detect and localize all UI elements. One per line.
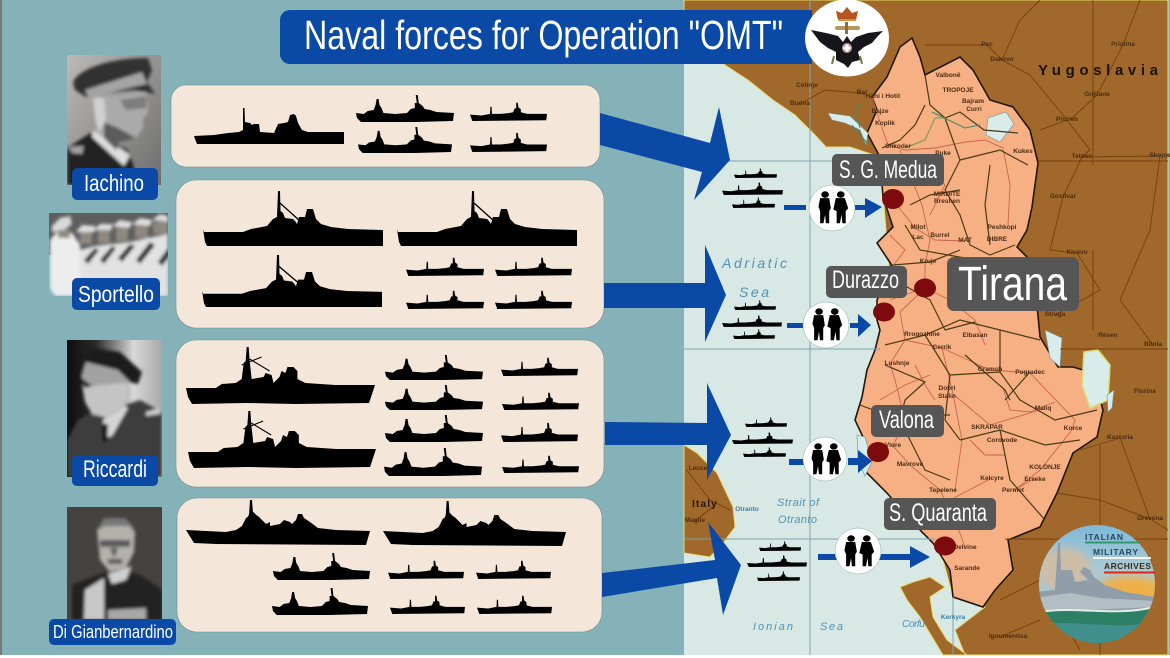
place names: Koplik [875,120,895,127]
name label [72,455,158,486]
place names: Kicevo [1066,249,1088,256]
logo: Italian Military Archives [1039,525,1155,643]
place names: Otranto [735,506,759,513]
place names: Budva [790,100,810,107]
label: Yugoslavia: Yugoslavia [1038,62,1159,79]
place names: Kruje [920,258,937,265]
marker: Valona [867,442,889,462]
place names: Dakovo [990,56,1014,63]
label: Tirana: Tirana [958,258,1067,311]
logo text: ARCHIVES [1104,561,1151,571]
logo text: MILITARY [1093,547,1138,557]
place names: Kerkyra [941,614,965,621]
place names: Tepelene [929,487,957,494]
place names: Lushnje [885,360,910,367]
place names: Sarande [954,565,980,572]
ships: cruisers [384,355,483,476]
place names: Kelcyre [980,475,1004,482]
logo text [1085,532,1151,571]
place names: Gnjilane [1084,91,1110,98]
ships: cruisers [356,95,454,153]
place names: Kastoria [1107,434,1133,441]
logo text: ITALIAN [1085,532,1123,542]
place names: Pristina [1111,41,1135,48]
landing arrow: Valona [789,450,872,473]
place names: Cerrik [933,344,952,351]
land: Albania [855,38,1103,607]
place names: Gostivar [1050,193,1077,200]
panel: Sportello force [176,180,604,328]
place names: Valbonë [936,72,961,79]
label: S. G. Medua [832,154,944,186]
label: S. Quaranta [884,498,996,530]
ships: battleships [186,500,566,546]
place names: Dobri [939,385,956,392]
marker: Tirana [914,278,936,298]
landing arrow: S. Quaranta [818,546,930,568]
arrow: Sportello to Durazzo [604,245,726,342]
label: Durazzo: Durazzo [832,266,899,294]
troops circle: Valona [803,437,847,481]
place names: Prizren [1056,116,1078,123]
ships: cruisers [272,553,370,615]
arrow: Riccardi to Valona [605,383,731,480]
place names: Grevena [1137,515,1163,522]
arrow: Di Gianbernardino to S. Quaranta [602,522,741,615]
place names: Lac [912,234,924,241]
label: Ionian Sea: Sea [820,621,843,633]
convoy: Valona [732,417,793,457]
place names: Struga [1045,311,1066,318]
label: Strait of Otranto: Otranto [778,514,817,526]
place names: MAT [958,237,972,244]
place names: Bitola [1144,341,1162,348]
place names: Stalin [938,393,956,400]
place names: Delvine [953,544,977,551]
place names: Puke [935,150,951,157]
place names: Tetovo [1072,153,1092,160]
ships: battleships [186,347,376,468]
label: S. G. Medua: S. G. Medua [839,156,937,184]
name label: Riccardi [83,456,147,483]
place names: Bajram [962,98,984,105]
icon: Savoy eagle emblem [805,0,889,76]
label: Italy: Italy [692,498,717,510]
grid lines [684,0,953,655]
place names: Bajze [872,108,889,115]
place names: Shkoder [885,143,911,150]
label: Valona: Valona [879,406,934,434]
place names: Mavrove [897,461,924,468]
portrait: Sportello [49,213,168,310]
place names: DIBRE [987,236,1008,243]
label: Adriatic Sea: Sea [739,284,769,300]
portrait: Di Gianbernardino [49,507,176,645]
land: Corfu [900,577,967,655]
place names: Burrel [930,232,950,239]
name label: Di Gianbernardino [53,622,173,642]
place names: Gramsh [978,366,1002,373]
place names: Elbasan [963,332,987,339]
label: Adriatic Sea: Adriatic [721,255,787,271]
name label: Sportello [78,281,154,307]
troops circle: S. G. Medua [809,185,855,231]
ships: destroyers [406,258,572,309]
panel: Di Gianbernardino force [177,498,602,632]
label: Valona [871,405,944,437]
place names: Vlore [885,442,902,449]
place names: Lecce [689,465,708,472]
convoy: Durazzo [722,300,782,339]
troops circle: Durazzo [803,302,849,348]
panel: Iachino force [171,85,600,167]
place names: Pogradec [1015,369,1045,376]
place names: Permet [1002,487,1025,494]
place names: Rreshen [934,198,960,205]
portrait: Iachino [67,55,161,200]
place names: TROPOJE [942,87,974,94]
land: Italy [684,445,735,557]
place names: Curri [966,106,982,113]
label: S. Quaranta: S. Quaranta [889,499,987,527]
place names: Igoumenitsa [989,633,1028,640]
label: Strait of Otranto: Strait of [777,497,820,509]
place names: Peshkopi [988,224,1017,231]
title banner [280,10,812,64]
ship: battleship [194,108,344,144]
label: Ionian Sea: Ionian [753,621,793,633]
marker: Durazzo [873,302,895,322]
place names: Florina [1134,388,1156,395]
convoy: S. Quaranta [747,541,807,581]
place names: Corovode [987,437,1018,444]
label: Durazzo [826,266,907,298]
ships: destroyers [388,561,552,614]
place names: Bar [857,89,868,96]
place names: Cetinje [796,82,818,89]
ships: destroyers [470,103,547,152]
label: Strait of Otranto [777,497,820,526]
arrow: Iachino to northern landing [600,107,730,200]
place names: Rrogozhine [904,331,940,338]
place names: Milot [910,224,926,231]
panel: Riccardi force [176,340,604,487]
place names: SKRAPAR [971,424,1003,431]
place names: KOLONJE [1029,464,1061,471]
ships: destroyers [501,358,579,473]
portrait: Riccardi [67,340,162,486]
troops circle: S. Quaranta [835,528,881,574]
landing arrow: S. G. Medua [784,198,882,218]
land: Yugoslavia and Greece [684,0,1168,655]
convoy: S. G. Medua [722,168,783,208]
label: Adriatic Sea [721,255,787,300]
place names: Korce [1064,425,1083,432]
marker: S. Quaranta [934,536,956,556]
name label [72,168,158,200]
place names [685,41,1170,640]
label: Corfu: Corfu [902,618,925,630]
marker: S. G. Medua [882,189,904,209]
place names: MIRDITE [934,191,961,198]
place names: Resen [1098,332,1118,339]
map of Albania and the southern Adriatic [684,0,1170,655]
lakes [828,112,1114,476]
place names: Pec [981,41,993,48]
label: Ionian Sea [753,621,843,633]
place names: Maglie [685,517,705,524]
place names: Hani i Hotit [866,93,901,100]
place names: Maliq [1035,405,1051,412]
name label: Iachino [84,170,144,196]
landing arrow: Durazzo [787,314,871,337]
place names: Kukes [1013,148,1033,155]
title text: Naval forces for Operation "OMT" [304,12,783,58]
ships: battleships [202,191,577,307]
roads and provincial borders [872,97,1075,547]
place names: Erseke [1024,476,1046,483]
